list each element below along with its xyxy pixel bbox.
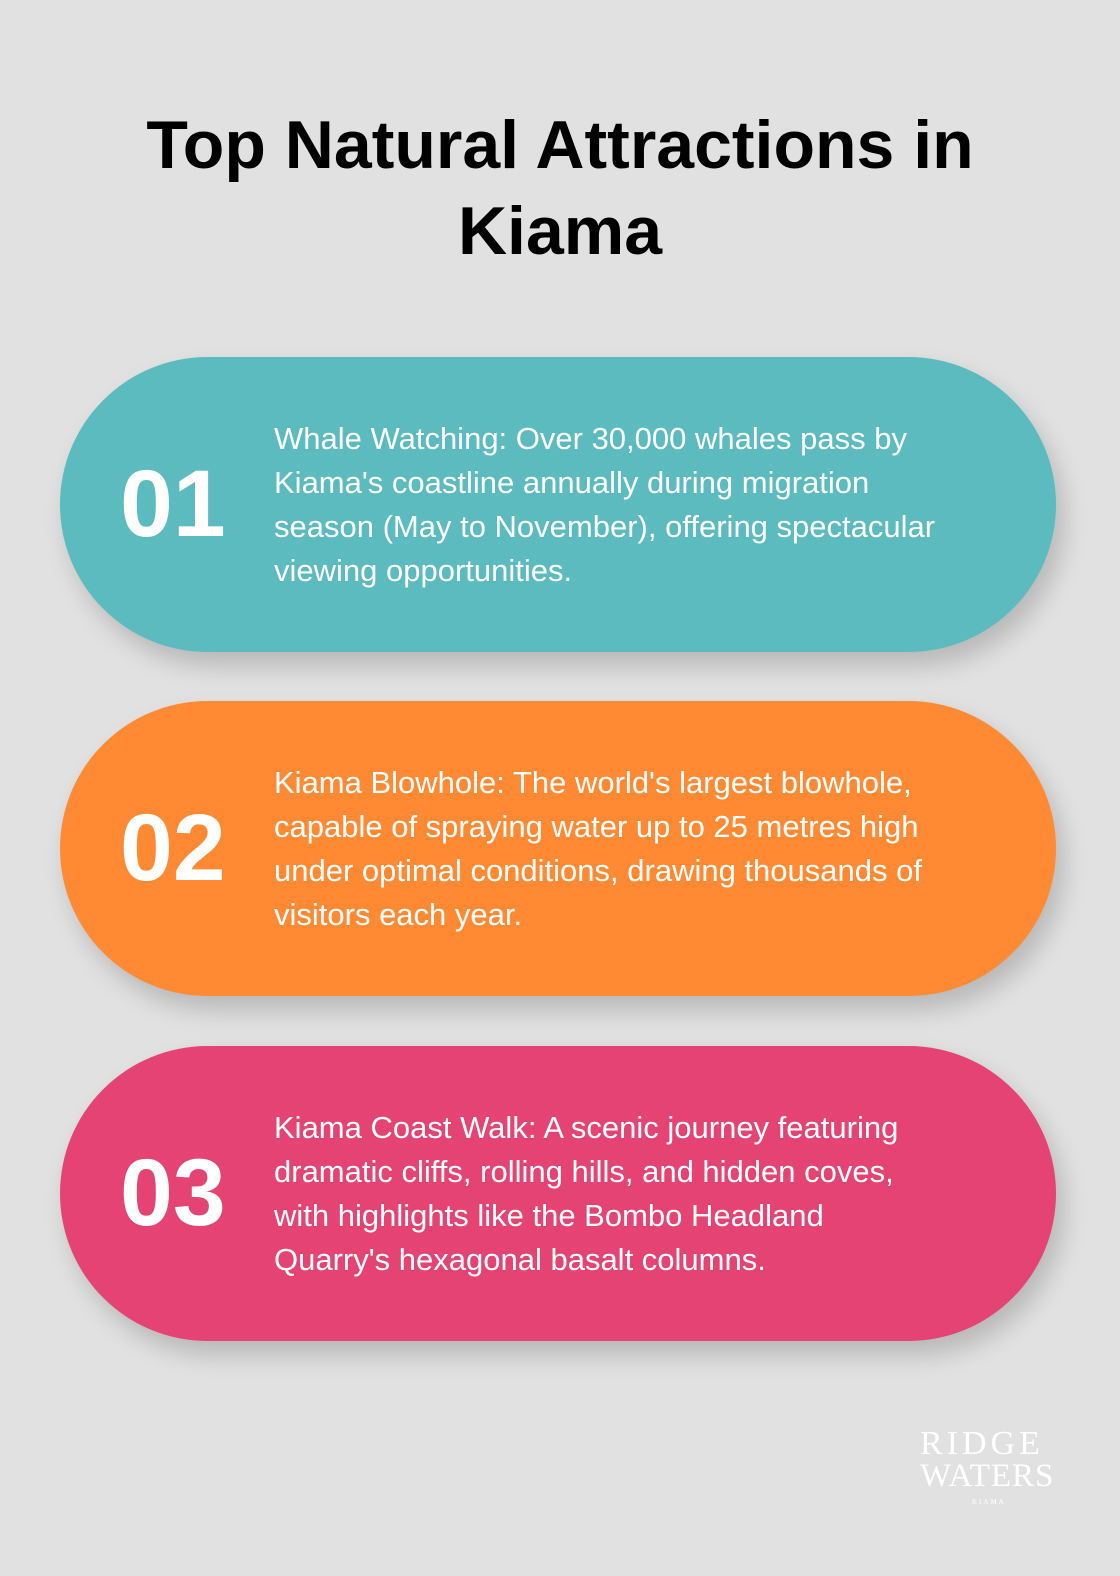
number 03: 03 [120, 1140, 226, 1246]
logo: WATERS [920, 1458, 1054, 1494]
text: coast walk: Kiama Coast Walk: A scenic journey featuring dramatic cliffs, rolling hills, and hidden coves, with highlights like the Bombo Headland Quarry's hexagonal basalt columns. [274, 1110, 898, 1276]
text: blowhole: Kiama Blowhole: The world's largest blowhole, capable of spraying water up to 25 metres high under optimal conditions, drawing thousands of visitors each year. [274, 764, 922, 932]
text: whale watching: Whale Watching: Over 30,000 whales pass by Kiama's coastline annually during migration season (May to November), offering spectacular viewing opportunities. [274, 420, 935, 588]
title [146, 107, 974, 269]
logo: KIAMA [972, 1498, 1006, 1506]
title: Top Natural Attractions in [146, 107, 974, 183]
panel: blowhole [60, 701, 1056, 996]
logo: RIDGE [920, 1425, 1044, 1462]
title: Kiama [458, 193, 662, 269]
panel: coast walk [60, 1046, 1056, 1341]
number 01: 01 [120, 451, 226, 557]
number 02: 02 [120, 795, 226, 901]
panel: whale watching [60, 357, 1056, 652]
logo [920, 1425, 1054, 1506]
